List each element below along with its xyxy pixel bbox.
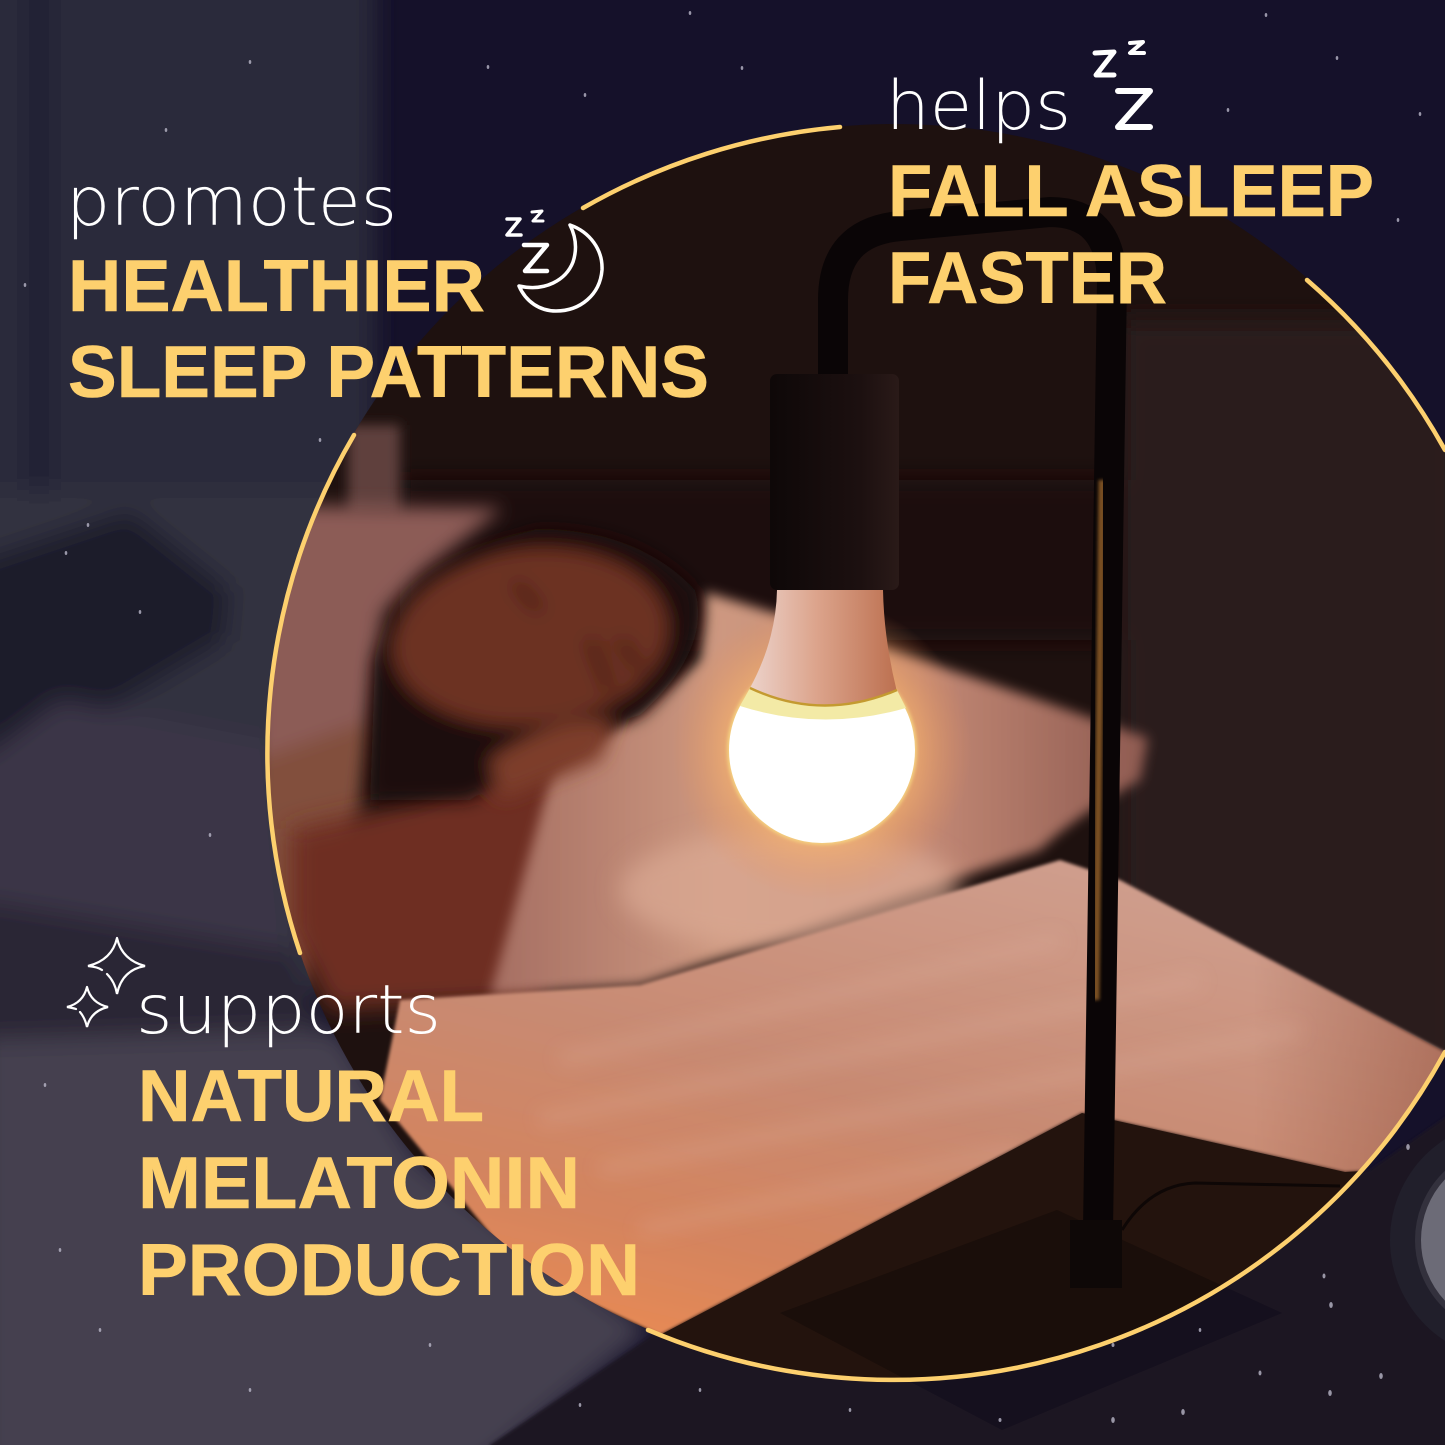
nightstand surface [662, 1113, 1358, 1334]
icon: zzz [1095, 42, 1150, 127]
lamp base plate [781, 1210, 1220, 1378]
sheet folds [656, 1149, 1012, 1228]
lamp foot [1070, 1220, 1122, 1288]
photo: bedroom inside the circle [255, 110, 1445, 1430]
sheet shading [1292, 976, 1443, 1171]
lamp arm [833, 212, 1112, 1230]
icon: sparkles [67, 938, 145, 1027]
sleeper's arm [282, 770, 557, 1023]
clock at lower right [1390, 1120, 1445, 1360]
text block: healthier sleep patterns: promotes [66, 163, 397, 242]
icon: moon with zzz [507, 211, 602, 311]
back pillow and body [255, 505, 503, 1000]
text block: natural melatonin production: supports [136, 971, 441, 1050]
text block: natural melatonin production [136, 971, 640, 1311]
text block: healthier sleep patterns: SLEEP PATTERNS [68, 332, 709, 413]
lamp reflection [1096, 480, 1102, 1000]
lamp socket [770, 374, 899, 590]
bed sheet [380, 860, 1445, 1335]
front pillow [490, 592, 1148, 995]
text block: natural melatonin production: NATURAL [138, 1056, 484, 1137]
text block: natural melatonin production: PRODUCTION [138, 1230, 640, 1311]
gold circle arcs [267, 127, 1445, 1380]
sleeper's head [370, 530, 698, 800]
text block: fall asleep faster: FASTER [888, 238, 1167, 319]
text block: fall asleep faster: FALL ASLEEP [888, 151, 1374, 232]
text block: fall asleep faster [886, 67, 1374, 319]
text block: natural melatonin production: MELATONIN [138, 1143, 580, 1224]
bulb glow [692, 618, 956, 884]
lamp base plate shadow [780, 1210, 1282, 1430]
pillow highlight [620, 830, 960, 950]
wall highlight [348, 425, 400, 515]
text block: healthier sleep patterns: HEALTHIER [68, 246, 485, 327]
bulb [727, 590, 917, 845]
text block: fall asleep faster: helps [886, 67, 1071, 146]
text block: healthier sleep patterns [66, 163, 709, 413]
lamp cord [1122, 1183, 1340, 1230]
